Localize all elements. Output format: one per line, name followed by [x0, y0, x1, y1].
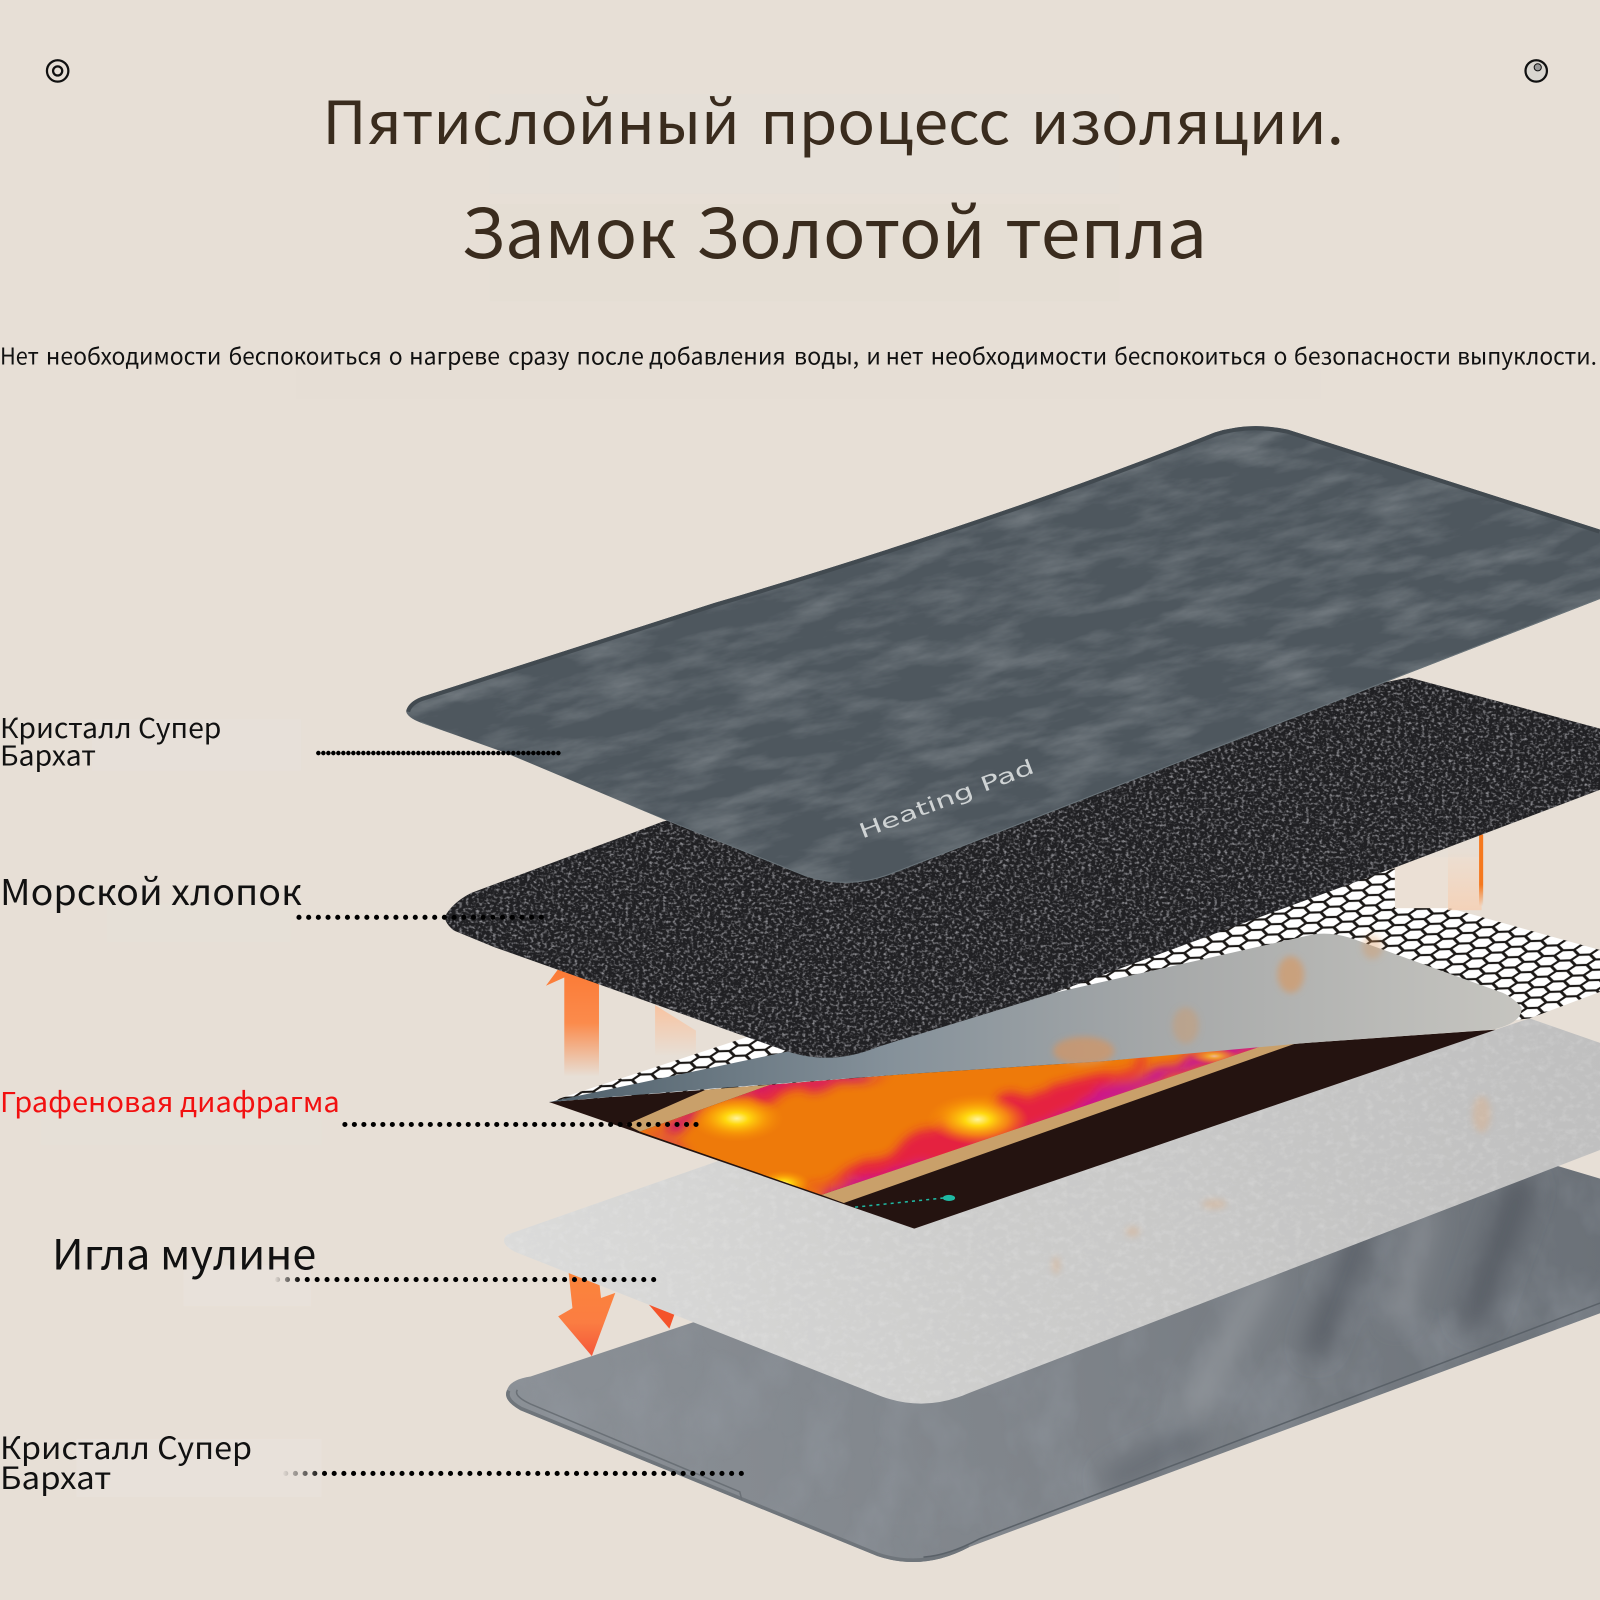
subtitle text: после	[577, 337, 644, 371]
title line two: Золотой	[696, 179, 986, 278]
subtitle text: и	[866, 337, 881, 371]
subtitle text: добавления	[649, 337, 786, 371]
title line one: изоляции.	[1031, 76, 1344, 162]
layer: needle felt	[490, 1010, 1600, 1418]
arrow: small down arrow	[645, 1300, 676, 1329]
layer: bottom crystal velvet	[490, 1153, 1600, 1582]
title line two: Замок	[461, 179, 677, 278]
title line two: тепла	[1005, 179, 1207, 278]
icon: left target mark	[47, 60, 68, 82]
layer: honeycomb reflective film	[549, 868, 1600, 1102]
subtitle text: нагреве	[409, 337, 500, 371]
subtitle text: выпуклости.	[1457, 337, 1597, 371]
teal dotted indicator	[855, 1195, 955, 1207]
leader line: sea cotton	[299, 915, 550, 920]
subtitle text: о	[1273, 337, 1287, 371]
title line one: Пятислойный	[322, 76, 740, 162]
arrow: right up arrow	[1395, 835, 1483, 910]
arrow: left up arrow	[546, 966, 599, 1082]
tan strip right	[821, 1041, 1303, 1203]
label: needle floss: Игла мулине	[52, 1221, 316, 1282]
label: crystal super velvet top: Кристалл Супер	[0, 706, 221, 746]
layer: top crystal velvet	[406, 426, 1600, 883]
subtitle text: необходимости	[931, 337, 1107, 371]
thermal image	[640, 1047, 1259, 1195]
leader line: needle	[278, 1277, 654, 1282]
title line one: процесс	[760, 76, 1010, 162]
subtitle text: беспокоиться	[1114, 337, 1266, 371]
icon: right globe mark	[1526, 60, 1547, 82]
logo: Heating Pad: Heating Pad	[855, 754, 1037, 843]
subtitle text: необходимости	[46, 337, 221, 371]
label: crystal super velvet bottom: Кристалл Супер	[0, 1423, 252, 1468]
leader line: top velvet	[318, 751, 559, 755]
foil heat stains	[1053, 935, 1383, 1065]
subtitle text: безопасности	[1294, 337, 1451, 371]
subtitle text: нет	[886, 337, 924, 371]
tan strip left	[627, 1085, 770, 1132]
arrow: large down arrow	[558, 1270, 615, 1356]
subtitle text: о	[389, 337, 403, 371]
layer: silver foil flap	[549, 934, 1522, 1102]
subtitle text: сразу	[508, 337, 569, 371]
subtitle text: Нет	[0, 337, 39, 371]
subtitle text: воды,	[794, 337, 859, 371]
label: crystal super velvet bottom: Бархат	[0, 1453, 111, 1498]
layer: graphene diaphragm heat film	[541, 1020, 1510, 1235]
label: crystal super velvet top: Бархат	[0, 733, 96, 773]
layer: sea cotton mesh	[439, 673, 1600, 1071]
subtitle text: беспокоиться	[229, 337, 382, 371]
label: sea cotton: Морской хлопок	[0, 865, 302, 916]
arrow: faint up arrow	[655, 1005, 696, 1056]
label: graphene diaphragm: Графеновая диафрагма	[0, 1080, 340, 1120]
leader line: graphene	[345, 1122, 698, 1127]
leader line: bottom velvet	[286, 1471, 746, 1476]
